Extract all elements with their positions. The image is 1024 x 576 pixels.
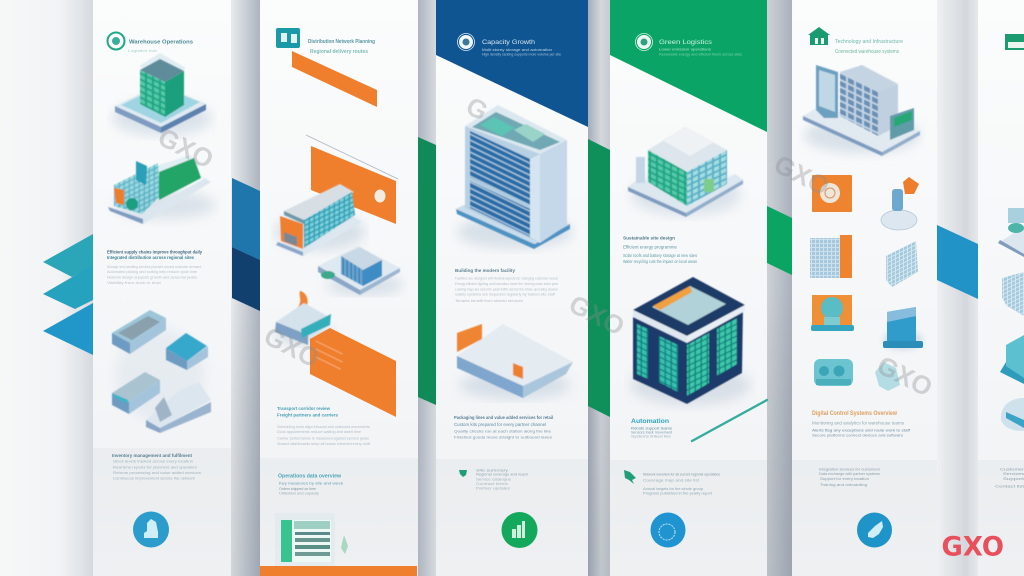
- panel 4 heading: Green Logistics: [659, 40, 712, 46]
- panel 3 mid text: Building the modern facility: [455, 268, 515, 273]
- panel 3 grey text: Regional coverage and reach: [476, 472, 528, 476]
- panel 4 round icon: [650, 512, 686, 548]
- panel 3 mid text: Energy efficient lighting and insulation lower the running costs each year: [455, 282, 559, 286]
- watermark 4: GXO: [564, 289, 629, 342]
- panel 4 mid text: Sustainable site design: [623, 236, 675, 240]
- panel 4: [610, 0, 767, 576]
- panel 3 lower text: Packaging lines and value added services for retail: [454, 415, 553, 420]
- panel 4 mid text: Water recycling cuts the impact on local areas: [623, 259, 697, 264]
- panel 2 mid text: Shared dashboards keep all teams informed every shift: [277, 442, 370, 446]
- band: blue between panels 5 and 6: [937, 225, 978, 299]
- panel 2 mid text: Scheduling tools align inbound and outbound movements: [277, 425, 370, 429]
- icon: cyan dome: [1001, 398, 1024, 431]
- unit A: [112, 310, 166, 354]
- panel 2 mid text: Carrier performance is measured against service goals: [277, 436, 369, 440]
- illustration: office block with screens: [803, 65, 920, 156]
- watermark 2: GXO: [259, 321, 324, 374]
- panel 1 mid text: Efficient supply chains improve throughput daily: [107, 250, 203, 254]
- panel 3 mid text: Loading bays are sized for peak traffic across the whole operating season: [455, 288, 558, 292]
- illustration: green warehouse on platform: [112, 53, 212, 136]
- orange banner top: [292, 51, 377, 107]
- panel 2 lower text: Key measures by site and week: [279, 480, 343, 486]
- panel 5 round icon: [857, 512, 892, 548]
- panel 6 grey text: Customer: [1000, 468, 1024, 472]
- panel 4 lower text: Robots support teams: [631, 426, 672, 430]
- panel 3 grey text: Site summary: [476, 468, 508, 472]
- panel 1 lower text: Inventory management and fulfilment: [112, 453, 193, 458]
- grey section small icon: [624, 470, 636, 484]
- panel 5 lower text: Alerts flag any exceptions and route work to staff: [812, 428, 911, 432]
- panel 4 lower text: [631, 418, 672, 438]
- panel 4 header icon: [636, 34, 652, 50]
- orange panel middle: [311, 146, 396, 224]
- panel 5 grey text: Training and onboarding: [820, 483, 867, 487]
- panel 2 lower text: Operations data overview: [278, 474, 341, 480]
- panel 4 grey text: Coverage map and site list: [643, 478, 700, 482]
- panel 3 lower text: Quality checks run at each station along the line: [454, 428, 552, 434]
- panel 4 mid text: [623, 236, 697, 264]
- band: green between panels 4 and 5: [767, 206, 792, 275]
- panel 5 lower text: Digital Control Systems Overview: [812, 410, 897, 417]
- panel 1 lower text: Returns processing and value added services: [113, 471, 201, 475]
- panel 1 lower text: [112, 453, 201, 480]
- panel 3 heading: Capacity Growth: [482, 40, 535, 46]
- panel 2 heading: Regional delivery routes: [310, 49, 368, 55]
- panel 3 grey text: [476, 468, 528, 490]
- icon: table with orange strip: [810, 235, 852, 278]
- panel 1 heading: Logistics hub: [128, 48, 158, 53]
- panel 1: [93, 0, 231, 576]
- left teal arrows: [43, 234, 93, 355]
- panel 3 mid text: Tenants benefit from shared services: [455, 299, 523, 303]
- panel 4 grey text: Progress published in the yearly report: [643, 492, 712, 496]
- icon: orange square with disc: [812, 175, 852, 212]
- illustration: long teal warehouse: [275, 184, 365, 256]
- illustration: small kiosk with orange flame: [275, 291, 335, 345]
- panel 3 lower text: [454, 415, 553, 440]
- panel 4 grey text: [643, 472, 720, 496]
- panel 1 mid text: Automated picking and sorting help reduce cycle time: [107, 270, 197, 274]
- icon: blue table block: [1002, 272, 1024, 316]
- illustration: data table card: [275, 513, 348, 566]
- illustration: tall louvred building: [456, 105, 573, 249]
- unit D: [146, 382, 211, 433]
- panel 2 heading: Distribution Network Planning: [308, 39, 375, 45]
- panel 3 mid text: Facilities are designed with flexible layouts for changing customer needs: [455, 276, 558, 280]
- panel 1 lower text: Continuous improvement across the network: [113, 476, 195, 480]
- panel 3 heading: [482, 40, 561, 56]
- panel 3 mid text: [455, 268, 559, 303]
- illustration: green roofed depot: [628, 127, 743, 217]
- panel 4 heading: Lower emission operations: [659, 48, 711, 52]
- panel 5 grey text: Data exchange with partner systems: [819, 472, 880, 476]
- panel 3 heading: High density racking supports more volume per site: [482, 52, 561, 56]
- panel 6 grey text: Contact list: [995, 484, 1024, 488]
- panel 3 lower text: Custom kits prepared for every partner channel: [454, 422, 546, 427]
- panel 5 heading: [835, 39, 903, 55]
- icon: cyan machine: [1000, 335, 1024, 384]
- panel 1 mid text: Integrated distribution across regional sites: [107, 255, 195, 260]
- unit B: [166, 333, 208, 370]
- panel 6 grey text: Services: [1003, 472, 1024, 476]
- panel 5 grey text: [819, 468, 880, 487]
- icon: blue hat stand: [883, 307, 923, 350]
- panel 2 mid text: Transport corridor review: [277, 406, 330, 412]
- panel 4 lower text: Automation: [631, 418, 669, 425]
- rule line: [306, 135, 398, 179]
- illustration: four small blue units: [112, 310, 211, 433]
- panel 2 lower text: [278, 474, 343, 496]
- panel 3 grey text: Partner updates: [476, 486, 510, 490]
- panel 4 lower text: Sensors track movement: [631, 430, 672, 434]
- panel 6 partial: [978, 0, 1024, 576]
- panel 4 grey text: Annual targets for the whole group: [643, 487, 703, 491]
- panel 1 header icon: [108, 32, 124, 50]
- icon: cyan device on orange: [811, 295, 854, 331]
- panel 1 lower text: Real time reports for planners and operators: [113, 466, 197, 470]
- panel 3 grey text: Contract terms: [476, 482, 508, 486]
- panel 4 grey text: Network overview for all current regional operations: [643, 472, 720, 476]
- watermark 1: GXO: [153, 122, 218, 175]
- icon: pedestal with orange tag: [881, 177, 919, 230]
- panel 5 heading: Connected warehouse systems: [835, 49, 899, 55]
- panel 4 mid text: Efficient energy programme: [623, 244, 678, 250]
- panel 2 header icon: [276, 28, 300, 48]
- panel 5 lower text: Secure platforms connect devices and software: [812, 434, 903, 438]
- panel 2: [260, 0, 418, 576]
- panel 6 header icon: [1005, 34, 1024, 50]
- panel 3 header icon: [458, 34, 474, 50]
- grey section small icon: [459, 470, 467, 477]
- panel 2 mid text: [277, 406, 370, 446]
- panel 1 mid text: Visibility from dock to door: [107, 281, 162, 285]
- watermark 5: GXO: [769, 149, 834, 202]
- panel 1 mid text: Storage and handling services planned around customer demand: [107, 265, 201, 269]
- band: blue between panels 1 and 2: [232, 178, 260, 311]
- panel 1 heading: [128, 40, 193, 53]
- panel 3 lower text: Finished goods move straight to outbound lanes: [454, 434, 552, 440]
- icon: open book: [886, 241, 918, 287]
- panel 3: [436, 0, 588, 576]
- icon: shield: [875, 362, 900, 391]
- panel 4 mid text: Solar roofs and battery storage at new sites: [623, 253, 697, 258]
- panel 5 grey text: Support for every location: [820, 477, 869, 481]
- icon: machine base: [998, 208, 1024, 257]
- panel 1 lower text: Stock levels tracked across every location: [113, 460, 193, 464]
- panel 2 heading: [308, 39, 375, 55]
- band: green between panels 3 and 4: [588, 139, 610, 417]
- panel 3 round icon: [502, 512, 538, 548]
- panel 6 grey text: Support: [1003, 477, 1024, 481]
- panel 2 mid text: Freight partners and carriers: [277, 412, 338, 418]
- panel 2 mid text: Dock appointments reduce waiting and dwell time: [277, 430, 361, 434]
- panel 4 heading: Renewable energy and efficient fleets across sites: [659, 52, 742, 56]
- band: green between panels 2 and 3: [418, 137, 436, 405]
- illustration: green and orange facility: [108, 155, 215, 224]
- teal diagonal accent line: [692, 400, 767, 441]
- orange footer bar: [260, 566, 417, 576]
- panel 1 mid text: [107, 250, 203, 285]
- illustration: flat white box with orange tags: [457, 324, 573, 399]
- orange panel lower: [310, 328, 396, 417]
- panel 2 lower text: Utilisation and capacity: [279, 492, 319, 496]
- blue header block: [436, 0, 588, 127]
- panel 3 grey text: Service catalogue: [476, 478, 511, 482]
- watermark 3: G: [461, 91, 493, 127]
- panel 4 lower text: Systems linked live: [631, 434, 671, 438]
- panel 6 grey text: [995, 468, 1024, 488]
- panel 5 heading: Technology and Infrastructure: [835, 39, 903, 45]
- panel 1 heading: Warehouse Operations: [129, 40, 193, 46]
- green header block: [610, 0, 767, 132]
- panel 5 lower text: Monitoring and analytics for warehouse teams: [812, 420, 905, 426]
- watermark 6: GXO: [872, 350, 937, 403]
- illustration: dark cube building with teal windows: [630, 277, 750, 405]
- panel 5: [792, 0, 937, 576]
- logo GXO: GXO: [942, 532, 1004, 562]
- panel 5 lower text: [812, 410, 911, 438]
- panel 3 mid text: Safety systems are inspected regularly by trained site staff: [455, 292, 555, 296]
- panel 1 round icon: [133, 512, 169, 548]
- panel 1 mid text: Network design supports growth and seasonal peaks: [107, 276, 197, 280]
- unit C: [112, 372, 160, 414]
- illustration: blue storage block: [318, 246, 403, 295]
- icon: teal console: [814, 359, 853, 386]
- panel 5 grey text: Integration services for customers: [819, 468, 880, 472]
- panel 4 heading: [659, 40, 742, 56]
- panel 3 heading: Multi storey storage and automation: [482, 48, 552, 52]
- panel 2 lower text: Orders shipped on time: [279, 487, 316, 491]
- panel 5 header icon: house: [808, 27, 830, 45]
